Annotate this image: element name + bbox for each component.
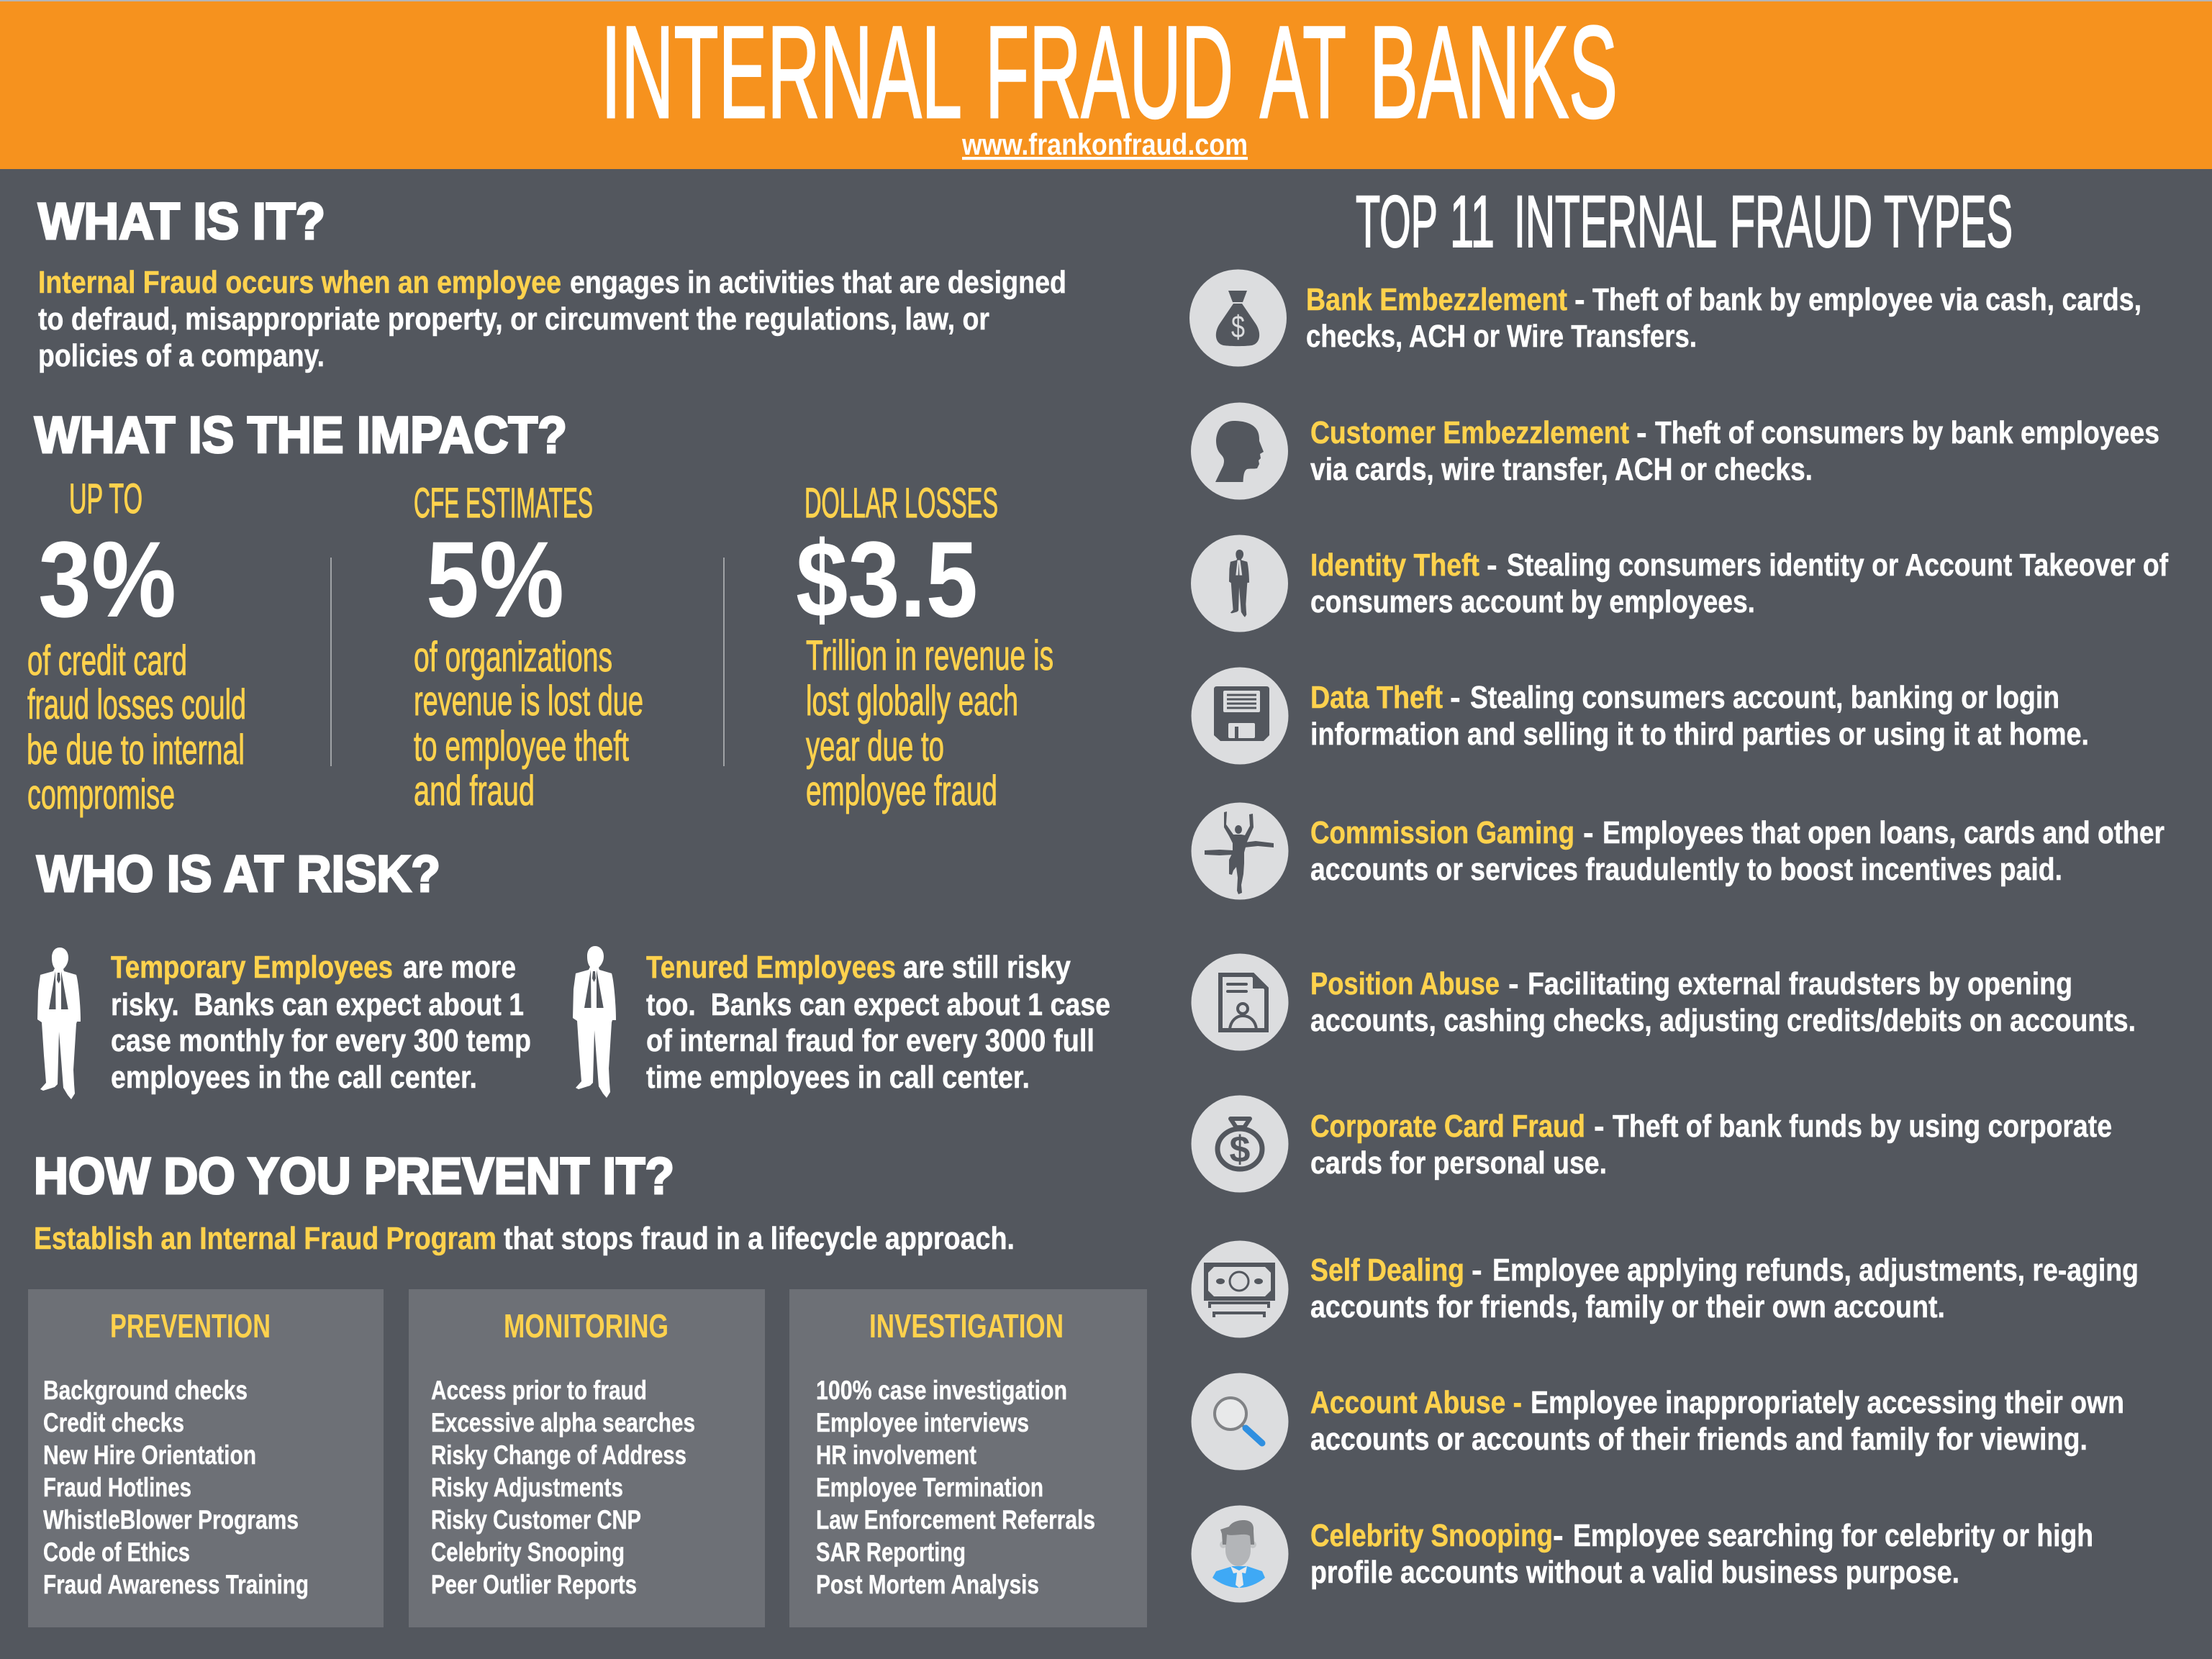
definition text: engages in activities that are designed <box>570 265 1066 300</box>
panel: investigation: SAR Reporting <box>816 1537 966 1567</box>
item: celebrity snooping <box>1192 1505 2093 1603</box>
item: customer embezzlement: - <box>1636 415 1647 450</box>
panel: prevention: WhistleBlower Programs <box>43 1505 299 1535</box>
title: INTERNAL <box>601 0 962 145</box>
icon: white businessman left <box>37 947 81 1099</box>
temporary employees text: employees in the call center. <box>111 1060 477 1095</box>
item: celebrity snooping: profile accounts without a valid business purpose. <box>1310 1555 1959 1590</box>
item: account abuse: Account Abuse - <box>1310 1385 1522 1420</box>
title: AT <box>1260 0 1346 145</box>
item: identity theft: - <box>1487 547 1497 583</box>
item: data theft: Stealing consumers account, banking or login <box>1470 680 2059 715</box>
panel: prevention: Fraud Awareness Training <box>43 1570 309 1599</box>
item: identity theft <box>1191 535 2168 632</box>
heading: fraud types <box>1356 181 2013 263</box>
item: bank embezzlement <box>1189 269 2141 367</box>
item: identity theft: Identity Theft <box>1310 547 1479 583</box>
temporary employees text: Temporary Employees <box>111 950 393 985</box>
stat: 3.5 trillion: employee fraud <box>806 768 997 814</box>
panel: monitoring: Peer Outlier Reports <box>431 1570 637 1599</box>
stat: 3 percent: of credit card <box>27 637 187 684</box>
stat: 3.5 trillion: DOLLAR LOSSES <box>804 480 998 527</box>
panel: monitoring: Risky Customer CNP <box>431 1505 641 1535</box>
definition text <box>38 265 1066 373</box>
item: commission gaming: - <box>1583 815 1594 850</box>
stat: 5 percent: CFE ESTIMATES <box>414 480 593 527</box>
item: account abuse <box>1192 1373 2124 1471</box>
item: commission gaming: accounts or services fraudulently to boost incentives paid. <box>1310 852 2062 887</box>
title <box>601 0 1618 145</box>
item: data theft: Data Theft <box>1310 680 1443 715</box>
tenured employees text <box>646 950 1110 1095</box>
heading: risk: WHO IS AT RISK? <box>37 846 440 903</box>
panel: monitoring: Risky Change of Address <box>431 1440 686 1470</box>
panel: investigation: HR involvement <box>816 1440 976 1470</box>
item: corporate card fraud: cards for personal use. <box>1310 1145 1607 1181</box>
panel: prevention <box>28 1289 384 1627</box>
item: data theft: - <box>1450 680 1461 715</box>
item: corporate card fraud: Corporate Card Fraud <box>1310 1109 1585 1144</box>
stat: 3.5 trillion: Trillion in revenue is <box>806 632 1053 679</box>
stat: 3.5 trillion: $3.5 <box>796 519 978 640</box>
stat: 5 percent <box>414 480 643 814</box>
definition text: Internal Fraud occurs when an employee <box>38 265 561 300</box>
stat: 5 percent: 5% <box>426 519 564 640</box>
title: FRAUD <box>985 0 1233 145</box>
panel: investigation: 100% case investigation <box>816 1376 1067 1405</box>
tenured employees text: are still risky <box>903 950 1071 985</box>
stat: 5 percent: to employee theft <box>414 723 629 770</box>
heading: fraud types: TOP <box>1356 181 1438 263</box>
panel: prevention: Fraud Hotlines <box>43 1473 191 1502</box>
tenured employees text: too. Banks can expect about 1 case <box>646 987 1110 1022</box>
item: bank embezzlement: - <box>1574 282 1585 317</box>
item: account abuse: Employee inappropriately accessing their own <box>1531 1385 2124 1420</box>
heading: impact: WHAT IS THE IMPACT? <box>35 407 567 464</box>
item: customer embezzlement: via cards, wire transfer, ACH or checks. <box>1310 452 1813 487</box>
stat: 5 percent: revenue is lost due <box>414 678 643 724</box>
stat: 3 percent: be due to internal <box>27 727 245 773</box>
item: commission gaming <box>1192 803 2165 899</box>
item: data theft: information and selling it to third parties or using it at home. <box>1310 717 2089 752</box>
section: how do you prevent it <box>28 1148 1147 1627</box>
item: self dealing: Self Dealing <box>1310 1253 1464 1288</box>
panel: investigation: INVESTIGATION <box>869 1307 1064 1345</box>
item: commission gaming: Commission Gaming <box>1310 815 1574 850</box>
panel: prevention: Background checks <box>43 1376 248 1405</box>
item: corporate card fraud: $ <box>1230 1129 1251 1171</box>
item: corporate card fraud: - <box>1594 1109 1605 1144</box>
item: account abuse: accounts or accounts of their friends and family for viewing. <box>1310 1422 2088 1457</box>
definition text: to defraud, misappropriate property, or circumvent the regulations, law, or <box>38 301 989 337</box>
panel: monitoring: Excessive alpha searches <box>431 1408 695 1437</box>
temporary employees text: risky. Banks can expect about 1 <box>111 987 524 1022</box>
heading: fraud types: FRAUD <box>1730 181 1872 263</box>
icon: white businessman right <box>573 946 616 1098</box>
temporary employees text <box>111 950 531 1095</box>
item: self dealing <box>1192 1240 2139 1338</box>
website link: www.frankonfraud.com <box>961 127 1248 161</box>
panel: investigation: Post Mortem Analysis <box>816 1570 1039 1599</box>
definition text: policies of a company. <box>38 338 325 373</box>
item: customer embezzlement <box>1191 403 2159 499</box>
panel: monitoring: Celebrity Snooping <box>431 1537 625 1567</box>
section: top 11 fraud types <box>1189 181 2168 1603</box>
heading: what is it: WHAT IS IT? <box>38 194 325 250</box>
heading: prevent: HOW DO YOU PREVENT IT? <box>34 1148 674 1205</box>
tenured employees text: Tenured Employees <box>646 950 896 985</box>
panel: monitoring: MONITORING <box>504 1307 668 1345</box>
item: bank embezzlement: $ <box>1231 309 1245 345</box>
panel: monitoring: Risky Adjustments <box>431 1473 623 1502</box>
item: celebrity snooping: Celebrity Snooping <box>1310 1518 1553 1553</box>
item: position abuse: Facilitating external fraudsters by opening <box>1528 966 2072 1001</box>
stat: 3 percent: fraud losses could <box>27 681 246 728</box>
stat: 3 percent: UP TO <box>69 476 142 522</box>
item: bank embezzlement: Bank Embezzlement <box>1306 282 1567 317</box>
temporary employees text: are more <box>403 950 516 985</box>
item: celebrity snooping: Employee searching for celebrity or high <box>1573 1518 2093 1553</box>
stat: 3 percent: compromise <box>27 771 175 818</box>
stat: 3.5 trillion: year due to <box>806 723 944 770</box>
item: self dealing: - <box>1472 1253 1482 1288</box>
stat: 3.5 trillion <box>796 480 1053 814</box>
heading: fraud types: 11 <box>1450 181 1495 263</box>
panel: prevention: PREVENTION <box>110 1307 271 1345</box>
tenured employees text: time employees in call center. <box>646 1060 1030 1095</box>
stat: 3 percent <box>27 476 246 818</box>
item: position abuse: Position Abuse <box>1310 966 1500 1001</box>
panel: monitoring: Access prior to fraud <box>431 1376 647 1405</box>
program intro text: that stops fraud in a lifecycle approach. <box>504 1221 1015 1256</box>
item: identity theft: consumers account by employees. <box>1310 584 1755 619</box>
item: position abuse <box>1192 954 2136 1050</box>
stat: 5 percent: of organizations <box>414 634 612 681</box>
panel: monitoring <box>409 1289 765 1627</box>
item: celebrity snooping: - <box>1553 1518 1564 1553</box>
panel: prevention: New Hire Orientation <box>43 1440 256 1470</box>
section: who is at risk <box>37 846 1110 1099</box>
panel: investigation: Employee Termination <box>816 1473 1043 1502</box>
stat: 3.5 trillion: lost globally each <box>806 678 1018 724</box>
header banner <box>0 0 2212 169</box>
panel: prevention: Credit checks <box>43 1408 184 1437</box>
stat: 3 percent: 3% <box>38 519 176 640</box>
program intro text: Establish an Internal Fraud Program <box>34 1221 497 1256</box>
title: BANKS <box>1369 0 1618 145</box>
heading: fraud types: TYPES <box>1884 181 2013 263</box>
temporary employees text: case monthly for every 300 temp <box>111 1023 531 1058</box>
item: corporate card fraud: Theft of bank funds by using corporate <box>1613 1109 2112 1144</box>
item: corporate card fraud <box>1192 1095 2112 1193</box>
panel: prevention: Code of Ethics <box>43 1537 190 1567</box>
panel: investigation <box>789 1289 1147 1627</box>
item: data theft <box>1192 668 2089 764</box>
section: what is the impact <box>27 407 1053 818</box>
item: bank embezzlement: checks, ACH or Wire Transfers. <box>1306 319 1697 354</box>
tenured employees text: of internal fraud for every 3000 full <box>646 1023 1094 1058</box>
panel: investigation: Law Enforcement Referrals <box>816 1505 1095 1535</box>
section: what is it <box>38 194 1066 373</box>
stat: 5 percent: and fraud <box>414 768 535 814</box>
panel: investigation: Employee interviews <box>816 1408 1029 1437</box>
item: customer embezzlement: Customer Embezzlement <box>1310 415 1629 450</box>
item: position abuse: - <box>1508 966 1519 1001</box>
heading: fraud types: INTERNAL <box>1514 181 1717 263</box>
item: self dealing: accounts for friends, family or their own account. <box>1310 1289 1945 1324</box>
program intro text <box>34 1221 1015 1256</box>
